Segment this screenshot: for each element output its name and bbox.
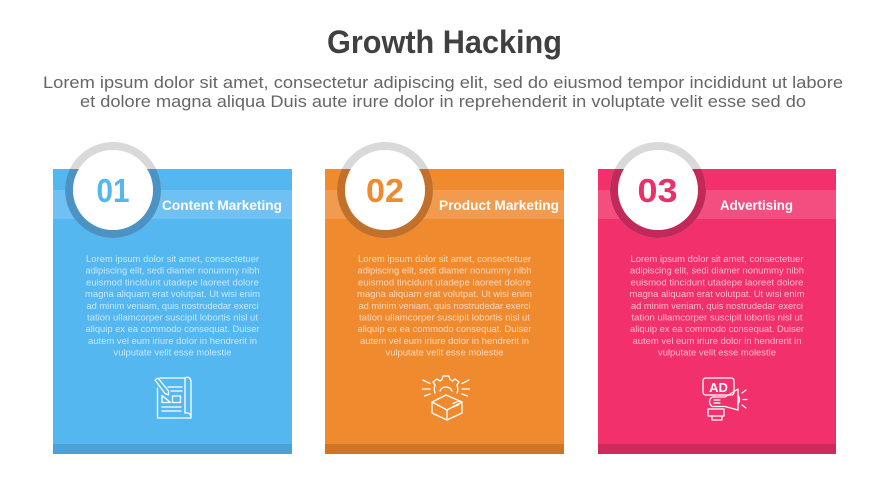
- heading band: [325, 190, 564, 219]
- icon: AD megaphone: AD: [709, 380, 728, 395]
- heading band: [598, 190, 836, 219]
- body text: autem vel eum iriure dolor in hendrerit in: [360, 336, 529, 346]
- body text: Lorem ipsum dolor sit amet, consectetuer: [630, 254, 804, 264]
- heading: Product Marketing: [439, 198, 559, 213]
- body text: [630, 254, 805, 358]
- body text: Lorem ipsum dolor sit amet, consectetuer: [86, 254, 259, 264]
- number ring: [341, 146, 429, 234]
- body text: euismod tincidunt utadepe laoreet dolore: [358, 277, 531, 287]
- body text: vulputate velit esse molestie: [386, 348, 504, 358]
- number: 01: [96, 172, 130, 209]
- title: Growth Hacking: [327, 24, 562, 60]
- card background: [325, 169, 564, 454]
- card background: [53, 169, 292, 454]
- icon: AD megaphone: [703, 378, 747, 420]
- subtitle: et dolore magna aliqua Duis aute irure dolor in reprehenderit in voluptate velit esse sed do: [80, 92, 806, 111]
- body text: adipiscing elit, sedi diamer nonummy nibh: [358, 266, 532, 276]
- body text: aliquip ex ea commodo consequat. Duiser: [358, 324, 532, 334]
- card background: [598, 169, 836, 454]
- icon: document and pencil: [155, 377, 191, 418]
- heading band: [53, 190, 292, 219]
- body text: vulputate velit esse molestie: [658, 348, 776, 358]
- body text: ad minim veniam, quis nostrudedar exerci: [358, 301, 530, 311]
- number ring: [69, 146, 157, 234]
- body text: [85, 254, 260, 358]
- number ring: [614, 146, 702, 234]
- panel: content marketing: [53, 146, 292, 454]
- body text: adipiscing elit, sedi diamer nonummy nibh: [630, 266, 804, 276]
- subtitle: Lorem ipsum dolor sit amet, consectetur adipiscing elit, sed do eiusmod tempor incididunt ut labore: [43, 73, 843, 92]
- body text: vulputate velit esse molestie: [114, 348, 232, 358]
- body text: ad minim veniam, quis nostrudedar exerci: [86, 301, 258, 311]
- body text: euismod tincidunt utadepe laoreet dolore: [630, 277, 804, 287]
- body text: tation ullamcorper suscipit lobortis nisl ut: [359, 312, 530, 322]
- body text: aliquip ex ea commodo consequat. Duiser: [86, 324, 260, 334]
- icon: box with gear: [422, 376, 470, 420]
- body text: tation ullamcorper suscipit lobortis nisl ut: [632, 312, 803, 322]
- body text: tation ullamcorper suscipit lobortis nisl ut: [87, 312, 258, 322]
- body text: adipiscing elit, sedi diamer nonummy nibh: [86, 266, 260, 276]
- body text: autem vel eum iriure dolor in hendrerit in: [88, 336, 257, 346]
- body text: magna aliquam erat volutpat. Ut wisi enim: [357, 289, 532, 299]
- body text: [357, 254, 532, 358]
- panel: product marketing: [325, 146, 564, 454]
- number: 03: [638, 172, 678, 209]
- body text: magna aliquam erat volutpat. Ut wisi enim: [85, 289, 260, 299]
- bottom band: [325, 444, 564, 454]
- body text: euismod tincidunt utadepe laoreet dolore: [86, 277, 259, 287]
- bottom band: [53, 444, 292, 454]
- heading: Content Marketing: [162, 198, 282, 213]
- heading: Advertising: [720, 198, 793, 213]
- subtitle: [43, 73, 843, 111]
- bottom band: [598, 444, 836, 454]
- body text: magna aliquam erat volutpat. Ut wisi enim: [630, 289, 805, 299]
- panel: advertising: [598, 146, 836, 454]
- number: 02: [366, 172, 404, 209]
- body text: aliquip ex ea commodo consequat. Duiser: [630, 324, 804, 334]
- body text: ad minim veniam, quis nostrudedar exerci: [631, 301, 803, 311]
- body text: Lorem ipsum dolor sit amet, consectetuer: [358, 254, 531, 264]
- body text: autem vel eum iriure dolor in hendrerit in: [632, 336, 802, 346]
